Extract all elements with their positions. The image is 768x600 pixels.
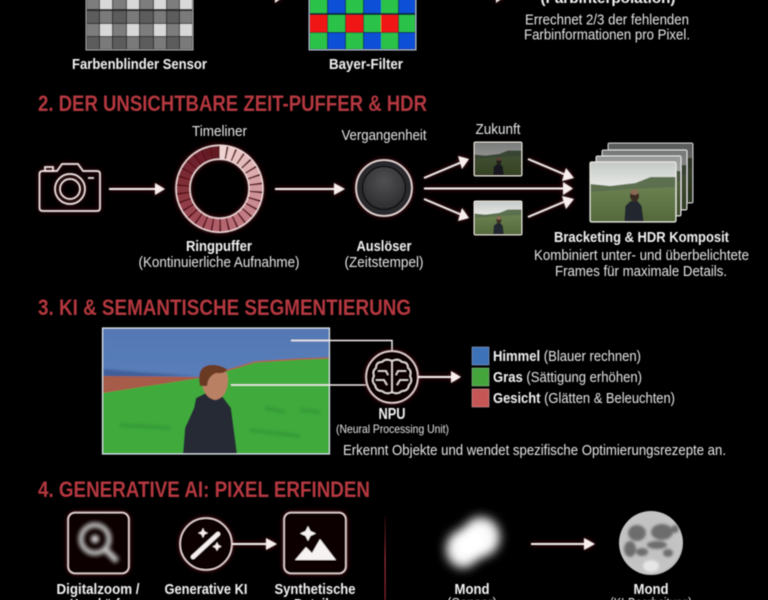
panel: section 2 time buffer and HDR	[40, 121, 749, 280]
legend: Gesicht: Gesicht (Glätten & Beleuchten)	[493, 390, 675, 407]
NPU label	[336, 406, 449, 436]
generative AI label: Generative KI	[164, 581, 248, 598]
heading: section 4: 4. GENERATIVE AI: PIXEL ERFINDEN	[38, 477, 370, 502]
photo: overexposed frame	[474, 201, 522, 235]
shutter button	[356, 160, 412, 216]
HDR composite text: Bracketing & HDR Komposit	[554, 229, 729, 246]
arrow: sensor to bayer	[219, 0, 284, 3]
connector lines: image to NPU	[231, 340, 392, 385]
sensor grid	[86, 0, 193, 50]
heading: section 3: 3. KI & SEMANTISCHE SEGMENTIERUNG	[38, 295, 411, 320]
icon: blurry zoom box	[68, 512, 129, 574]
demosaicing description	[524, 0, 690, 44]
arrows: shutter to frames	[424, 156, 574, 221]
label: AI moon	[610, 581, 692, 600]
photo: segmented portrait	[102, 328, 330, 454]
divider	[384, 516, 386, 600]
heading: section 2: 2. DER UNSICHTBARE ZEIT-PUFFER & HDR	[38, 91, 427, 116]
legend: Himmel: Himmel (Blauer rechnen)	[493, 348, 641, 365]
segmentation caption: Erkennt Objekte und wendet spezifische Optimierungsrezepte an.	[343, 442, 726, 459]
label: AI moon: Mond	[634, 581, 668, 598]
legend: Gras: Gras (Sättigung erhöhen)	[493, 369, 642, 386]
shutter label	[344, 238, 424, 271]
icon: synthetic details	[284, 512, 346, 574]
label: Vergangenheit: Vergangenheit	[342, 127, 427, 144]
ring buffer	[168, 137, 271, 240]
arrow: generative AI to details	[232, 538, 277, 550]
NPU label: (Neural Processing Unit)	[336, 422, 449, 436]
panel: section 4 generative AI	[56, 511, 692, 600]
arrow: blurry moon to AI moon	[531, 538, 595, 550]
shutter label: (Zeitstempel)	[344, 254, 424, 271]
label: sensor moon: Mond	[454, 581, 490, 598]
label: Zukunft: Zukunft	[476, 121, 521, 138]
demosaicing description: Farbinformationen pro Pixel.	[524, 26, 690, 44]
demosaicing description: Errechnet 2/3 der fehlenden	[525, 12, 689, 28]
bayer label: Bayer-Filter	[329, 56, 403, 73]
arrow: camera to ring	[109, 183, 165, 195]
photo: underexposed frame	[474, 142, 522, 176]
panel: section 1 demosaicing	[72, 0, 690, 73]
legend	[472, 347, 675, 407]
shutter label: Auslöser	[356, 238, 412, 255]
arrow: bayer to demosaicing	[442, 0, 505, 3]
image: blurry moon	[446, 517, 500, 568]
arrow: zoom to generative AI	[137, 543, 180, 545]
ring label: Ringpuffer	[186, 238, 252, 255]
ring label	[138, 238, 300, 271]
sensor label: Farbenblinder Sensor	[72, 56, 207, 73]
icon: camera	[40, 164, 100, 211]
ring label: (Kontinuierliche Aufnahme)	[138, 254, 300, 271]
panel: section 3 segmentation	[102, 328, 726, 459]
photo stack: HDR composite	[590, 143, 693, 222]
arrow: NPU to legend	[418, 371, 461, 383]
bayer filter grid	[309, 0, 416, 50]
label: Timeliner: Timeliner	[192, 123, 247, 140]
arrow: ring to shutter	[275, 183, 345, 195]
zoom label: Digitalzoom /	[56, 581, 140, 598]
HDR composite text: Frames für maximale Details.	[555, 263, 727, 280]
NPU label: NPU	[378, 406, 406, 423]
icon: magic wand	[180, 518, 232, 570]
details label: Synthetische	[274, 581, 356, 598]
HDR composite text	[534, 229, 749, 280]
icon: NPU brain	[366, 351, 418, 403]
image: detailed moon	[619, 511, 683, 575]
